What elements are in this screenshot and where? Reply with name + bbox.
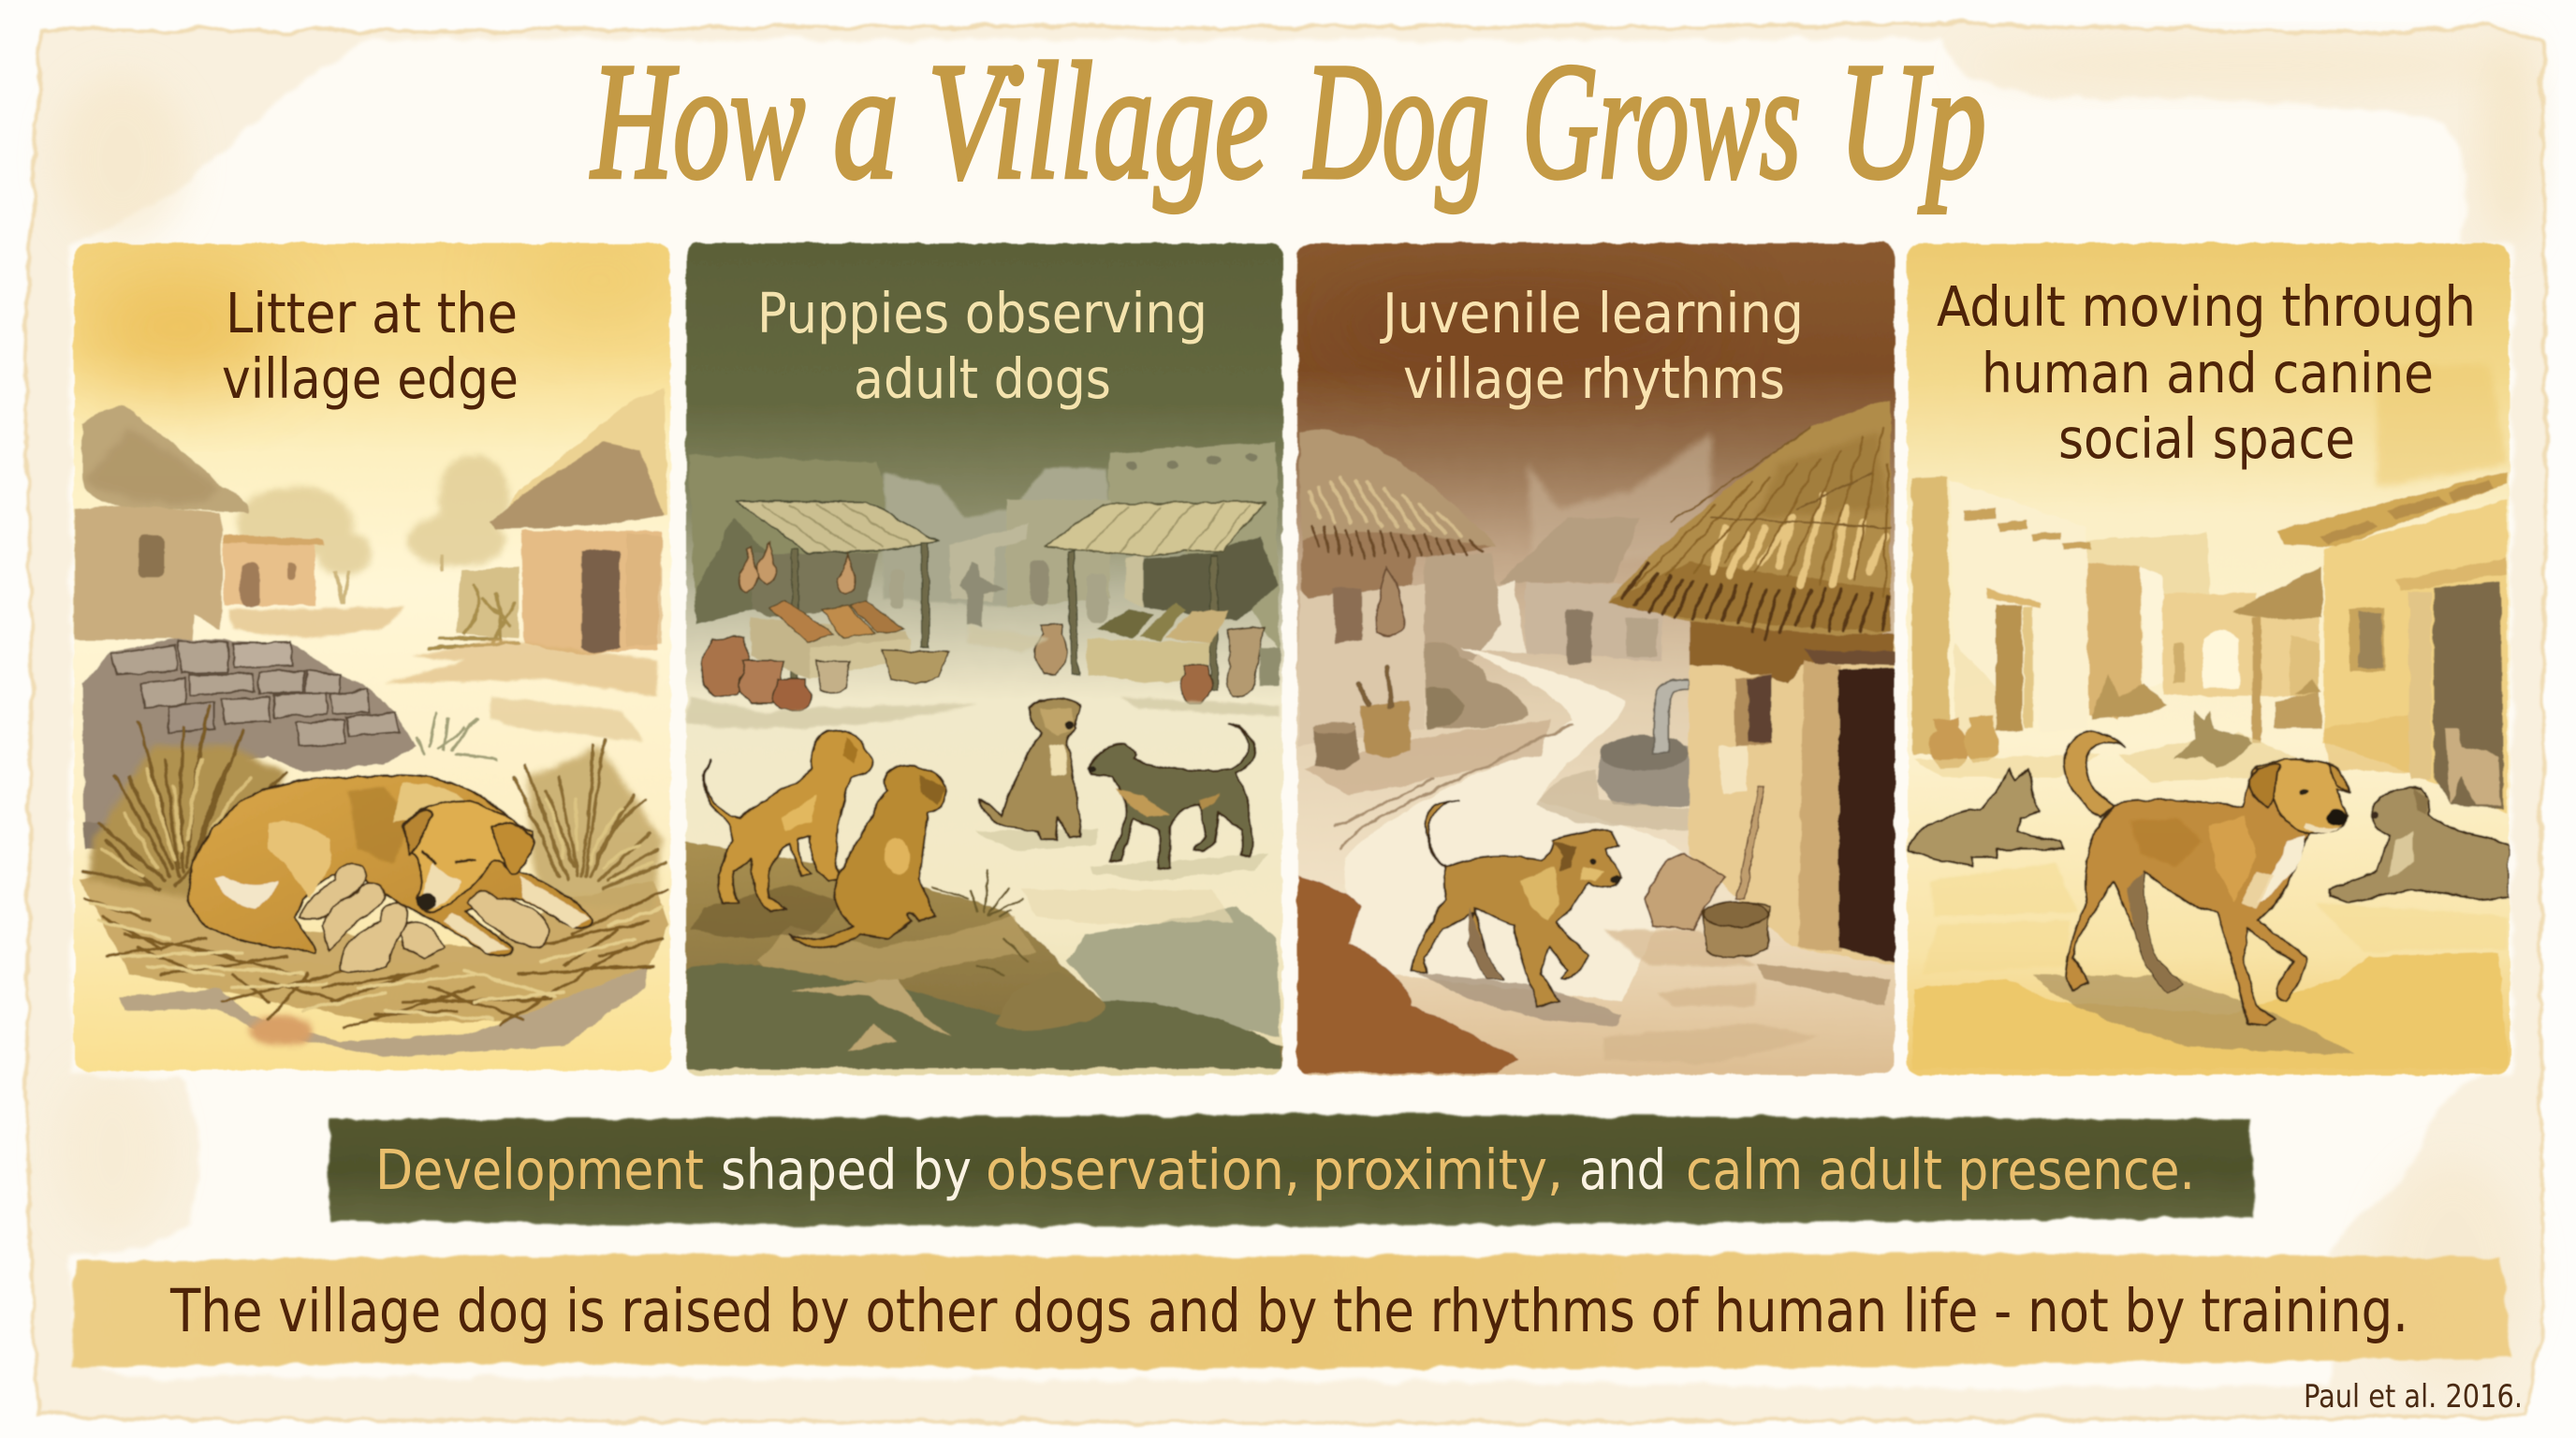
panel 1: litter at the village edge — [66, 234, 683, 1077]
panel 1 caption: village edge — [222, 346, 519, 411]
banner wash — [71, 1253, 2510, 1369]
panel 3 caption: village rhythms — [1403, 346, 1785, 411]
panel 2: puppies observing adult dogs — [679, 234, 1292, 1081]
panel 2 caption — [757, 281, 1208, 411]
banner text: observation, — [986, 1137, 1300, 1202]
panel 4: adult moving through human and canine social space — [1900, 234, 2518, 1081]
gold takeaway banner — [71, 1253, 2510, 1369]
title: Grows — [1522, 28, 1801, 213]
panel 3 caption — [1379, 281, 1804, 411]
banner text: calm adult presence. — [1686, 1137, 2195, 1202]
banner text: and — [1579, 1137, 1666, 1202]
title: a — [833, 28, 899, 213]
panel 1 caption: Litter at the — [226, 281, 518, 345]
panel 4 caption: social space — [2058, 406, 2355, 471]
panel 3 caption: Juvenile learning — [1379, 281, 1804, 345]
panel 2 caption: adult dogs — [854, 346, 1111, 411]
panel 4 caption: Adult moving through — [1937, 274, 2476, 339]
title: How — [591, 28, 805, 213]
banner wash — [328, 1114, 2254, 1226]
source credit: Paul et al. 2016. — [2304, 1378, 2523, 1416]
panel 1 caption — [222, 281, 519, 411]
panel 3: juvenile learning village rhythms — [1292, 234, 1900, 1081]
title: Village — [928, 28, 1268, 213]
panel 2 illustration — [679, 234, 1292, 1081]
panel 1 illustration — [66, 234, 683, 1077]
panel 3 illustration — [1292, 234, 1900, 1081]
green summary banner — [328, 1114, 2254, 1226]
panel 2 caption: Puppies observing — [757, 281, 1208, 345]
title: Up — [1838, 28, 1986, 213]
banner text: shaped by — [721, 1137, 972, 1202]
title: Dog — [1304, 28, 1489, 213]
panel 4 caption: human and canine — [1982, 341, 2434, 405]
banner text — [375, 1137, 2195, 1202]
banner text: proximity, — [1312, 1137, 1563, 1202]
panel 4 caption — [1937, 274, 2476, 471]
banner text: Development — [375, 1137, 704, 1202]
title — [591, 28, 1986, 213]
panel 4 illustration — [1900, 234, 2518, 1081]
